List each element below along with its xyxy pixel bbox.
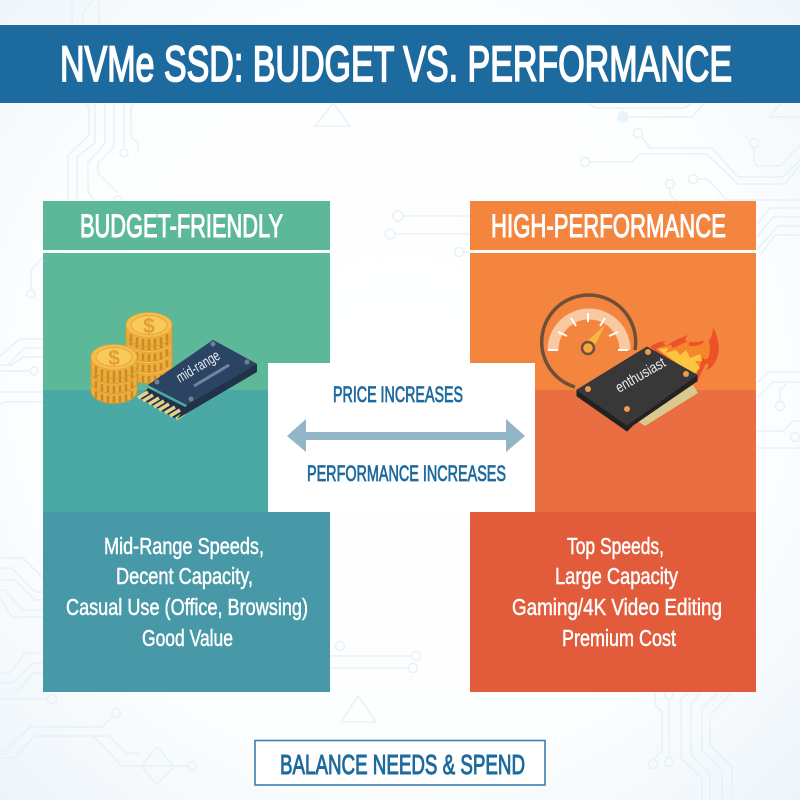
callout: balance needs and spend: BALANCE NEEDS & SPEND	[280, 749, 525, 780]
label: performance increases: PERFORMANCE INCREASES	[307, 461, 506, 486]
text block: high-performance features	[512, 533, 722, 651]
icon: flames	[650, 327, 719, 382]
icon: mid-range SSD	[138, 340, 257, 419]
icon: speedometer	[542, 295, 636, 387]
panel header: high-performance	[470, 201, 756, 250]
title banner	[0, 25, 800, 103]
callout: balance needs and spend	[255, 740, 545, 785]
panel body: budget-friendly colour bands	[43, 253, 330, 692]
text block: budget-friendly features: Mid-Range Speeds,	[104, 533, 264, 559]
icon: coin stacks: $	[143, 315, 155, 338]
panel: centre comparison	[268, 363, 535, 512]
icon: enthusiast SSD: enthusiast	[612, 354, 669, 396]
icon: coin stacks	[91, 312, 172, 404]
icon: coin stacks: $	[108, 347, 120, 370]
panel body: high-performance colour bands	[470, 253, 756, 692]
text block: high-performance features: Large Capacity	[555, 563, 678, 589]
text block: high-performance features: Top Speeds,	[567, 533, 664, 559]
text block: high-performance features: Premium Cost	[562, 625, 676, 651]
arrow: double-headed	[287, 419, 525, 452]
panel header: budget-friendly	[43, 201, 330, 250]
text block: high-performance features: Gaming/4K Video Editing	[512, 594, 722, 620]
icon: mid-range SSD: mid-range	[173, 347, 223, 386]
text block: budget-friendly features	[66, 533, 308, 651]
panel: budget-friendly	[43, 201, 330, 692]
label: price increases: PRICE INCREASES	[333, 382, 463, 407]
text block: budget-friendly features: Good Value	[142, 625, 233, 651]
text block: budget-friendly features: Decent Capacity,	[116, 563, 253, 589]
panel header: budget-friendly: BUDGET-FRIENDLY	[80, 208, 283, 244]
text block: budget-friendly features: Casual Use (Office, Browsing)	[66, 594, 308, 620]
panel: high-performance	[470, 201, 756, 692]
icon: enthusiast SSD	[577, 347, 698, 431]
